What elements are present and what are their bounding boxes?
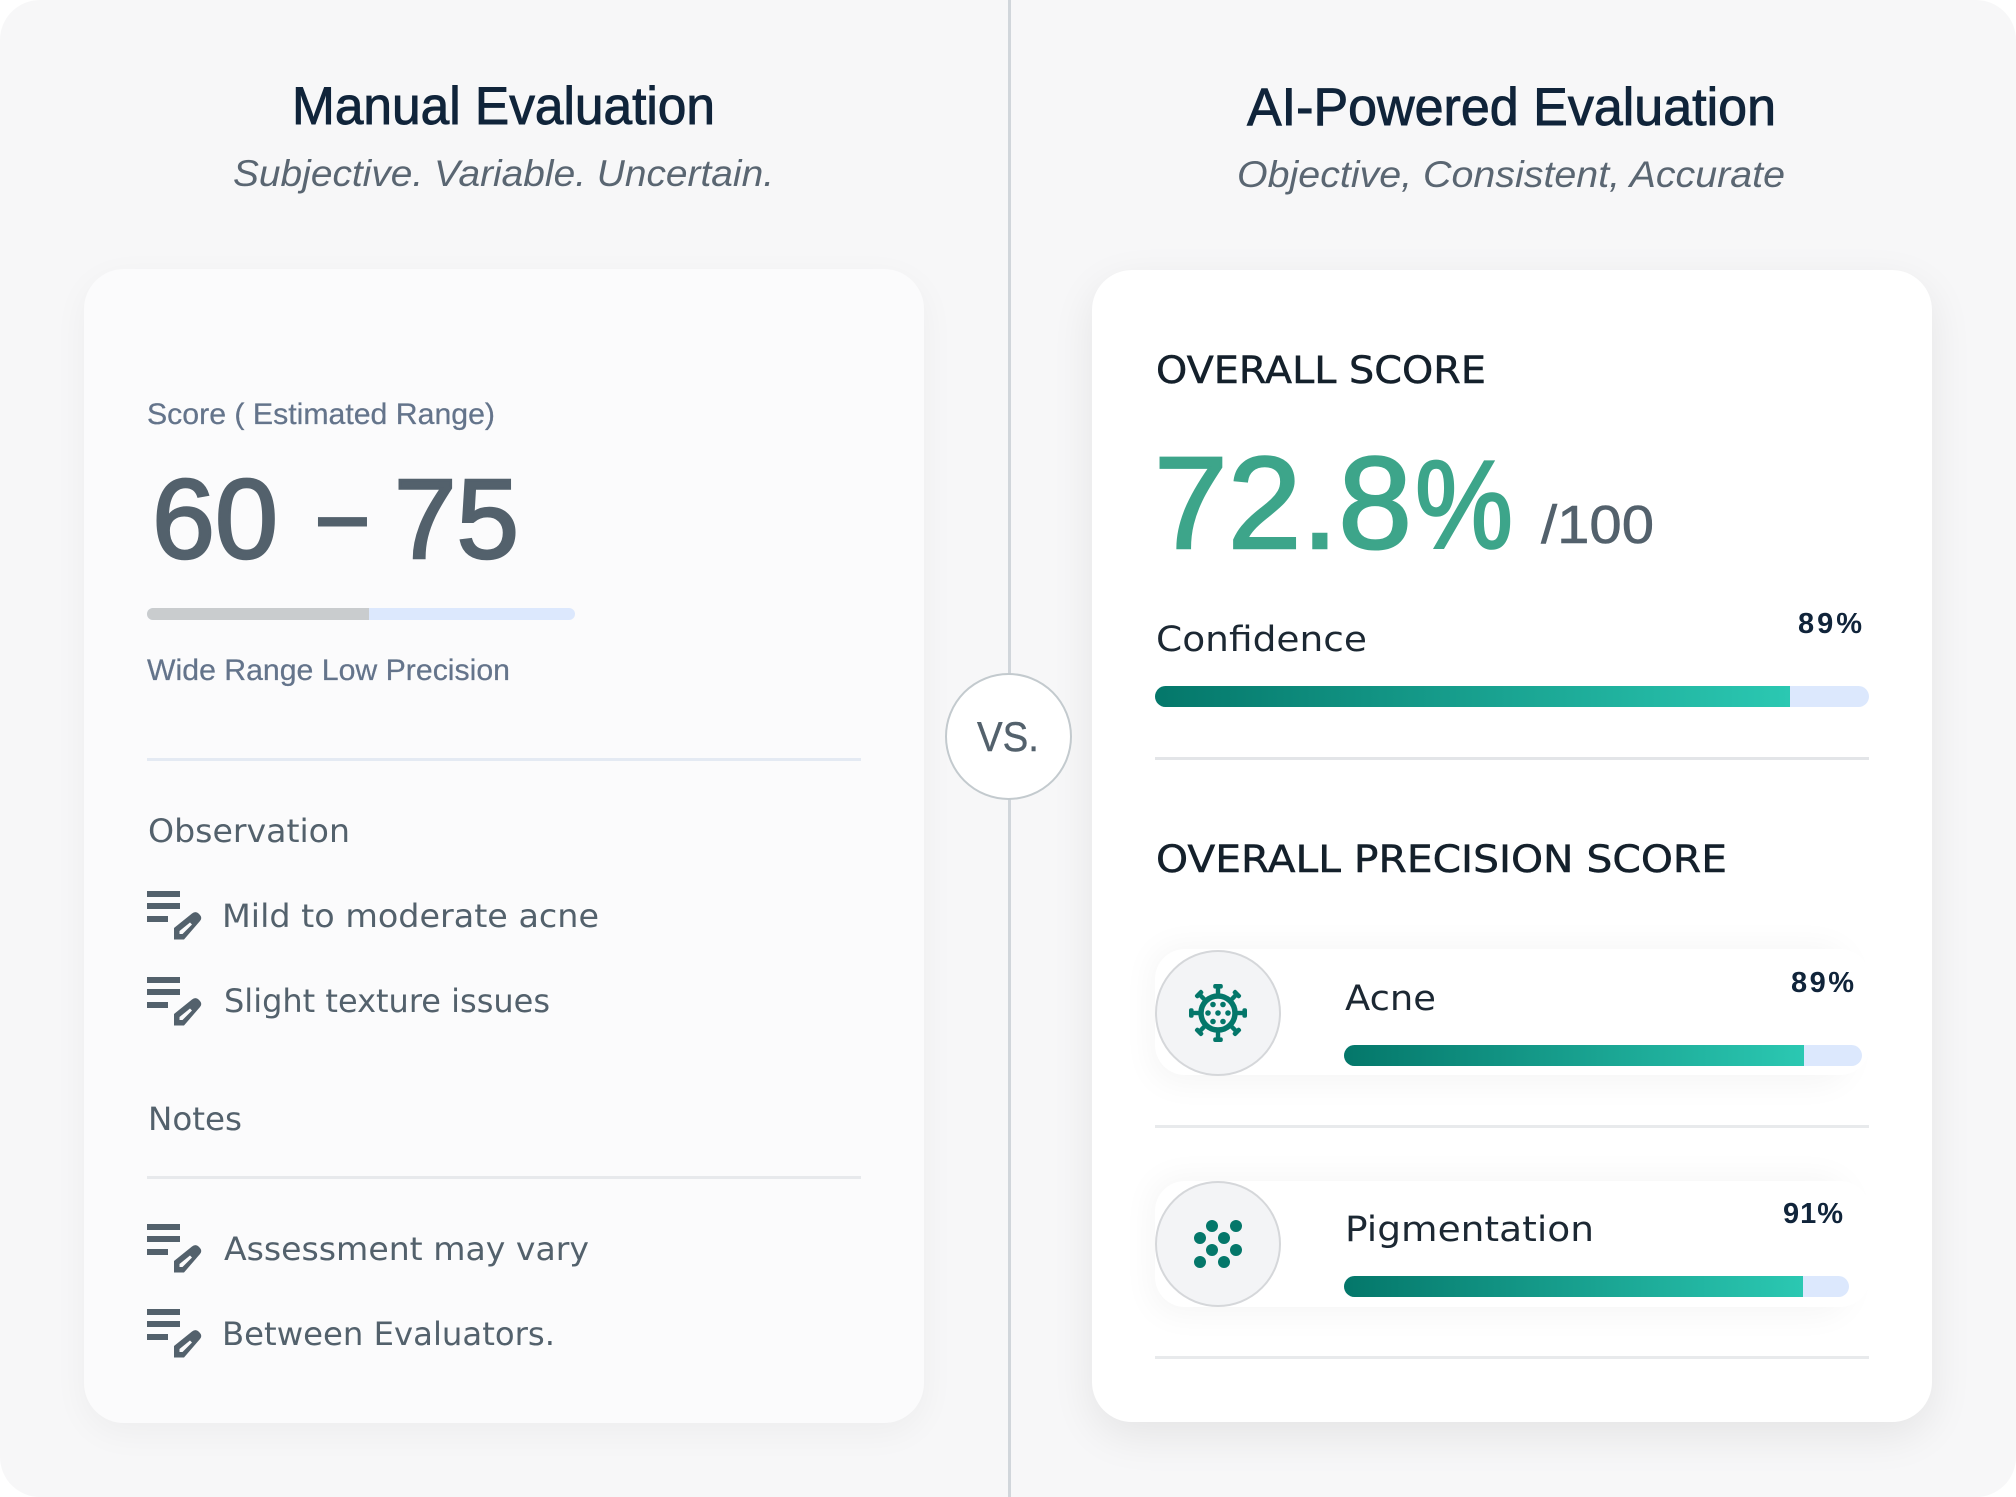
row: pigmentation [1155, 1181, 1849, 1307]
pigmentation bar [1344, 1276, 1849, 1297]
observation item: acne: Mild to moderate acne [222, 897, 599, 935]
panel: AI evaluation card [1092, 270, 1932, 1436]
confidence bar [1155, 686, 1869, 707]
overall score heading: OVERALL SCORE [1156, 349, 1486, 392]
observation item: texture [147, 977, 550, 1026]
confidence label: Confidence [1156, 620, 1367, 660]
row: acne [1155, 950, 1862, 1076]
pigmentation label: Pigmentation [1345, 1210, 1594, 1250]
range bar [147, 608, 575, 620]
center divider line [1008, 0, 1011, 1497]
VS badge [946, 674, 1071, 799]
score denominator: /100 [1541, 495, 1654, 555]
note item: assessment [147, 1224, 589, 1272]
overall score value: 72.8 [1154, 429, 1412, 576]
left heading [233, 77, 774, 194]
VS badge: VS. [977, 713, 1039, 760]
score range value: – [320, 470, 366, 559]
observation heading: Observation [148, 812, 350, 850]
acne label: Acne [1345, 979, 1436, 1019]
overall score value: % [1415, 436, 1513, 575]
score range value: 60 [152, 456, 278, 582]
acne bar [1344, 1045, 1862, 1066]
icon: pigmentation dots [1156, 1182, 1280, 1306]
note item: evaluators: Between Evaluators. [222, 1315, 555, 1353]
left heading: Manual Evaluation [292, 77, 715, 136]
score range value: 75 [394, 456, 519, 582]
panel: manual evaluation card [147, 402, 861, 1358]
left heading: Subjective. Variable. Uncertain. [233, 153, 774, 194]
right heading: Objective, Consistent, Accurate [1237, 154, 1785, 195]
note item: evaluators [147, 1309, 555, 1358]
icon: virus [1156, 951, 1280, 1075]
observation item: acne [147, 891, 599, 940]
acne percent: 89% [1791, 967, 1854, 999]
precision heading: OVERALL PRECISION SCORE [1156, 838, 1727, 881]
right heading [1237, 78, 1785, 195]
notes heading: Notes [148, 1100, 242, 1138]
precision caption: Wide Range Low Precision [147, 654, 510, 687]
right heading: AI-Powered Evaluation [1247, 78, 1776, 137]
score range value [152, 456, 519, 582]
observation item: texture: Slight texture issues [224, 982, 550, 1020]
note item: assessment: Assessment may vary [224, 1230, 589, 1268]
score label: Score ( Estimated Range) [147, 398, 495, 431]
pigmentation percent: 91% [1783, 1198, 1843, 1230]
confidence percent: 89% [1798, 608, 1862, 640]
